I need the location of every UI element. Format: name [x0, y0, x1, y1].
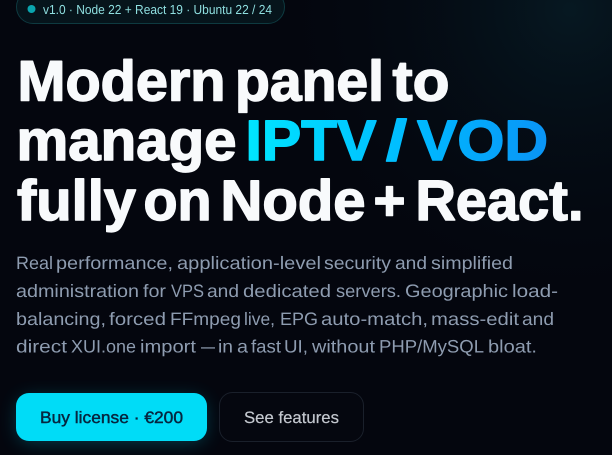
description: and — [522, 309, 554, 329]
title: React. — [416, 169, 584, 233]
description: without — [311, 336, 375, 356]
description: — — [201, 336, 215, 356]
title: Modern — [18, 49, 226, 113]
description: dedicated — [243, 281, 331, 301]
version badge — [16, 0, 284, 24]
description: forced — [109, 309, 166, 329]
description: auto-match, — [321, 309, 428, 329]
title accent: VOD — [417, 109, 548, 173]
description: security — [324, 253, 391, 273]
description: Geographic — [405, 281, 508, 301]
description: in — [218, 336, 233, 356]
icon: status dot — [28, 5, 36, 13]
title — [16, 49, 584, 233]
title accent: IPTV — [246, 109, 376, 173]
description: balancing, — [16, 309, 106, 329]
description: VPS — [171, 281, 204, 301]
title: manage — [16, 109, 236, 173]
title: Node — [220, 169, 366, 233]
title accent: / — [386, 109, 407, 173]
button: see features — [220, 392, 364, 442]
button: buy license: Buy license · €200 — [40, 409, 183, 427]
description: mass-edit — [431, 309, 519, 329]
description: simplified — [431, 253, 513, 273]
title: panel — [235, 49, 384, 113]
description: XUI.one — [71, 336, 136, 356]
description: PHP/MySQL — [379, 336, 484, 356]
description: Real — [16, 253, 53, 273]
description: load- — [512, 281, 558, 301]
description: application-level — [177, 253, 321, 273]
description — [16, 253, 558, 356]
description: FFmpeg — [170, 309, 241, 329]
button: buy license — [16, 393, 207, 442]
title: on — [144, 169, 212, 233]
description: performance, — [56, 253, 173, 273]
description: fast — [251, 336, 281, 356]
description: for — [143, 281, 166, 301]
button: see features: See features — [244, 409, 339, 427]
description: EPG — [280, 309, 318, 329]
description: bloat. — [488, 336, 537, 356]
title: fully — [17, 169, 136, 233]
description: UI, — [284, 336, 308, 356]
description: import — [140, 336, 196, 356]
description: servers. — [336, 281, 401, 301]
description: a — [237, 336, 249, 356]
description: live, — [244, 309, 275, 329]
description: administration — [16, 281, 139, 301]
description: and — [395, 253, 427, 273]
badge text: v1.0 · Node 22 + React 19 · Ubuntu 22 / 24 — [43, 2, 272, 17]
title accent — [246, 109, 548, 173]
description: and — [207, 281, 239, 301]
description: direct — [16, 336, 67, 356]
title: + — [374, 169, 406, 233]
title: to — [392, 49, 450, 113]
